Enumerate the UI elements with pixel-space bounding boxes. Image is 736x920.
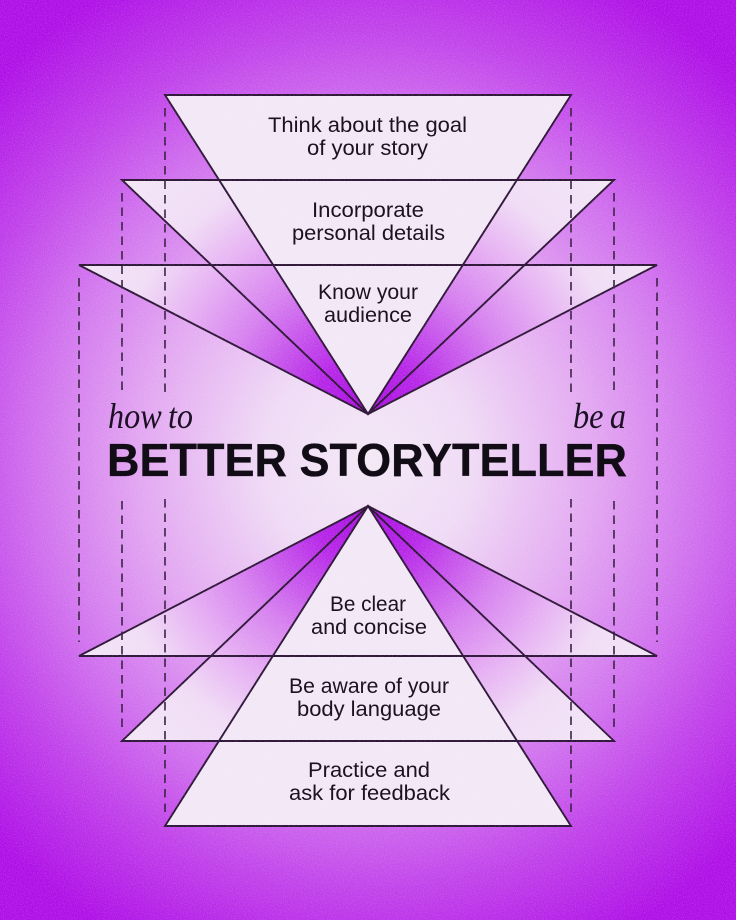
triangle: be clear and concise layer — [79, 506, 657, 656]
dashed guide lines — [79, 108, 657, 812]
triangle: body language layer — [122, 506, 614, 741]
text: be aware of your: Be aware of your — [289, 675, 449, 698]
text: practice and: Practice and — [308, 759, 430, 782]
triangle: know your audience layer — [79, 265, 657, 414]
triangle: think about the goal layer — [165, 95, 571, 414]
subtitle: be a: be a — [573, 396, 626, 436]
text: know your: Know your — [318, 281, 418, 304]
text: and concise: and concise — [311, 616, 427, 639]
top triangle stack — [79, 95, 657, 414]
text: audience: audience — [324, 304, 412, 327]
text: of your story: of your story — [307, 137, 429, 160]
text: ask for feedback: ask for feedback — [289, 782, 451, 805]
divider lines across centre triangles — [79, 180, 657, 741]
triangle: practice and feedback layer — [165, 506, 571, 826]
title: BETTER STORYTELLER — [107, 434, 627, 486]
text: be clear: Be clear — [330, 593, 406, 616]
subtitle: how to: how to — [108, 396, 193, 436]
text: incorporate: Incorporate — [312, 199, 424, 222]
text: body language: body language — [297, 698, 441, 721]
text: personal details: personal details — [292, 222, 445, 245]
bottom triangle stack — [79, 506, 657, 826]
triangle: incorporate personal details layer — [122, 180, 614, 414]
text: think about the goal: Think about the goal — [268, 114, 467, 137]
